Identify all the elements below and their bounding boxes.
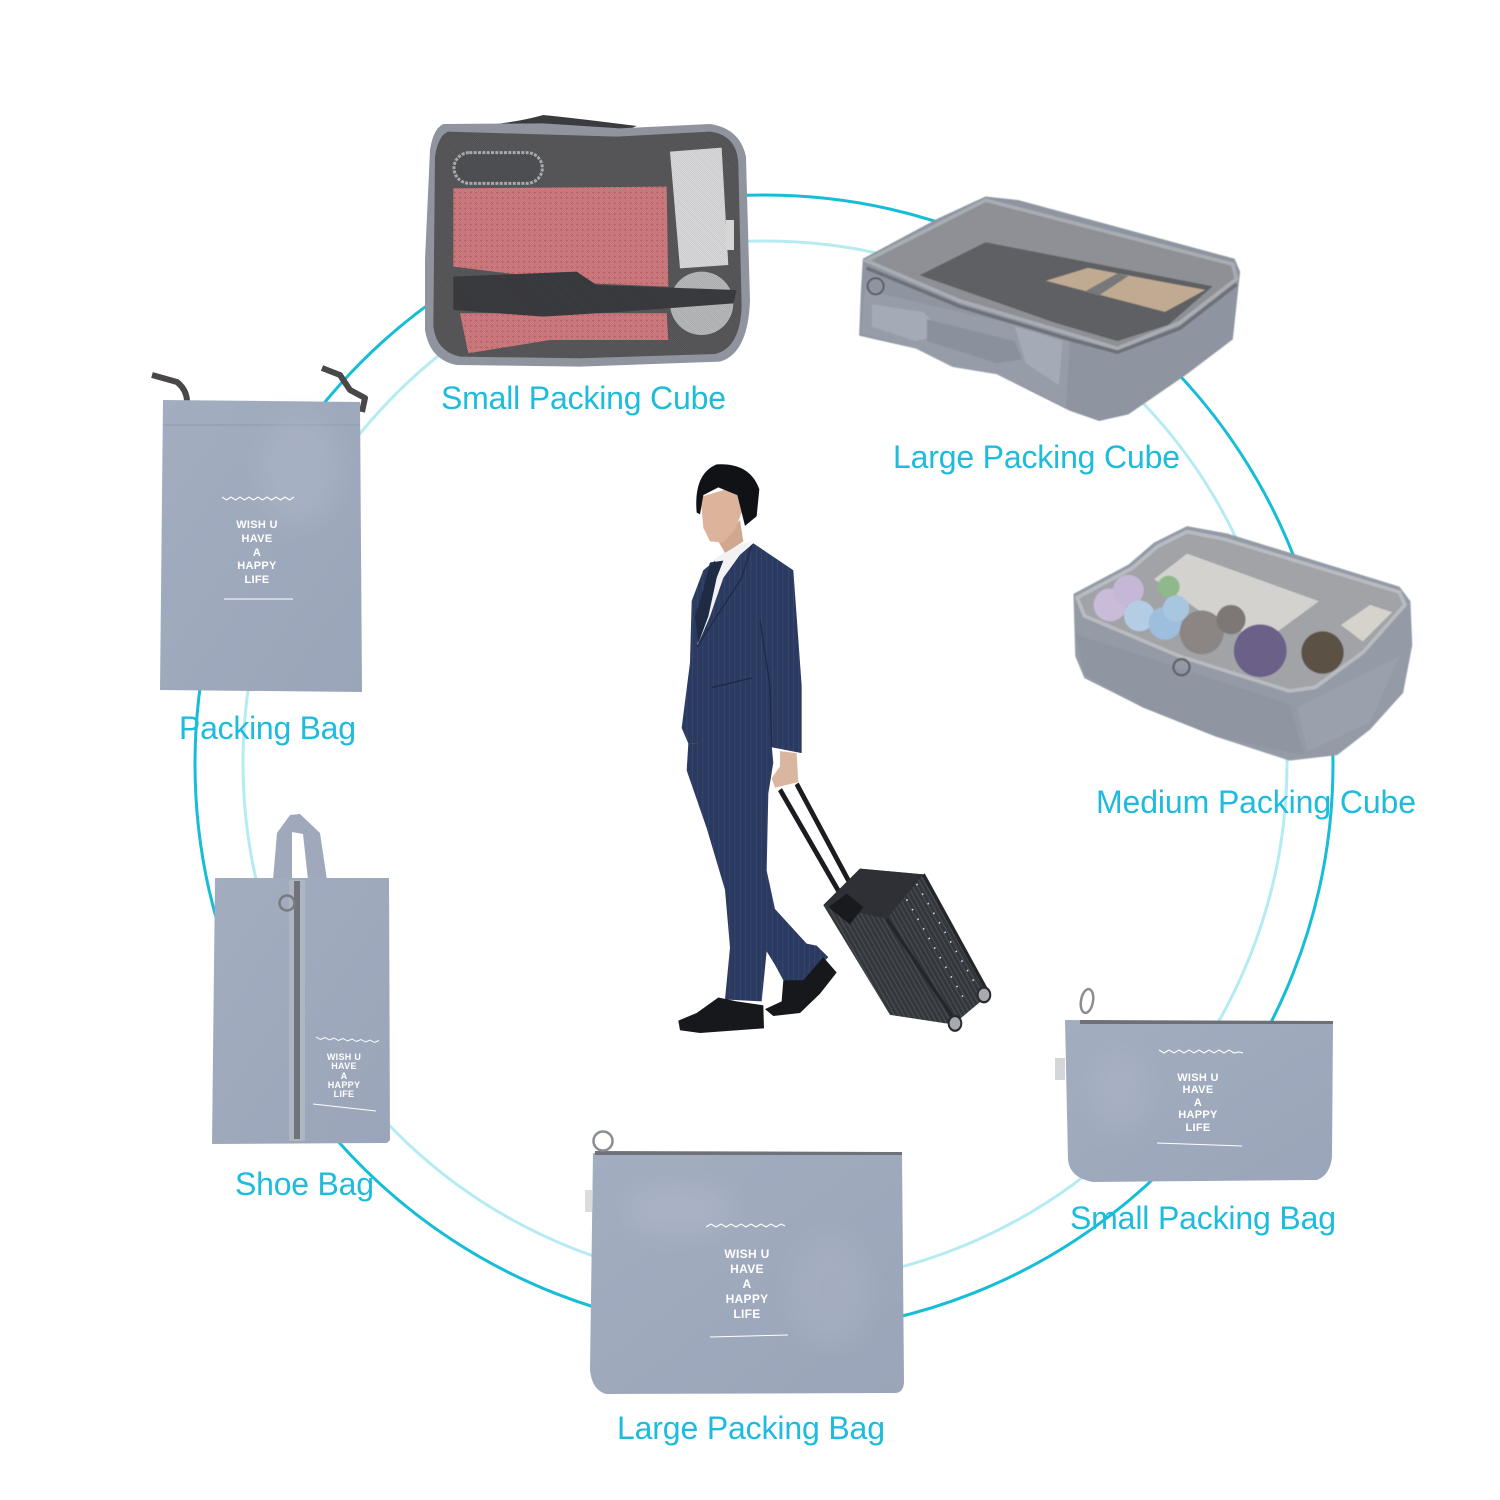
large packing cube (859, 196, 1240, 421)
zipper strip (1080, 1020, 1333, 1024)
trousers (687, 743, 828, 1001)
shirt (695, 541, 752, 632)
shoes (678, 998, 764, 1033)
suitcase (823, 869, 990, 1031)
label: large packing bag: Large Packing Bag (617, 1410, 885, 1446)
jacket (682, 543, 802, 753)
round tin (670, 272, 733, 335)
towel (453, 187, 668, 353)
bag slogan: HAPPY (237, 560, 277, 572)
bag slogan: LIFE (1185, 1122, 1211, 1134)
small packing bag (1055, 988, 1333, 1182)
white box (670, 148, 728, 268)
inner pale ring (243, 241, 1287, 1285)
bag slogan: WISH U (724, 1247, 770, 1261)
medium packing cube (1073, 526, 1412, 761)
side shading (861, 290, 1070, 407)
small packing cube (425, 115, 750, 367)
bag slogan: LIFE (244, 574, 270, 586)
neck (718, 520, 743, 553)
bag slogan: HAPPY (726, 1292, 768, 1306)
zipper (289, 880, 305, 1141)
bag slogan: HAVE (331, 1061, 357, 1071)
bag slogan: A (1194, 1097, 1202, 1109)
mesh lid (866, 200, 1236, 348)
tie (695, 561, 723, 643)
label: small packing bag: Small Packing Bag (1070, 1200, 1336, 1236)
bag slogan: LIFE (733, 1307, 761, 1321)
shoe bag (212, 814, 390, 1144)
face (701, 486, 742, 542)
hair (696, 464, 759, 526)
label: small packing cube: Small Packing Cube (441, 380, 726, 416)
paper contents (1154, 554, 1319, 642)
label: medium packing cube: Medium Packing Cube (1096, 784, 1416, 820)
outer cyan ring (195, 195, 1333, 1333)
large packing bag (585, 1132, 904, 1394)
zipper rings (868, 278, 884, 294)
bag slogan: HAPPY (1178, 1109, 1218, 1121)
bag slogan: HAVE (242, 533, 272, 545)
bag slogan: WISH U (236, 519, 278, 531)
zipper strip (595, 1151, 902, 1155)
traveller with suitcase (678, 464, 990, 1033)
scrunchies (1094, 588, 1127, 621)
tag (726, 220, 734, 250)
bag slogan: WISH U (327, 1052, 361, 1062)
bag slogan: LIFE (334, 1089, 354, 1099)
bag slogan: HAVE (1183, 1084, 1213, 1096)
zipper rings (1173, 659, 1190, 675)
mesh lid (1077, 532, 1405, 691)
drawstrings (152, 368, 365, 412)
bag slogan: HAPPY (328, 1080, 360, 1090)
label: shoe bag: Shoe Bag (235, 1166, 374, 1202)
photo card (1046, 268, 1205, 312)
bag slogan: A (341, 1071, 348, 1081)
hair brush (453, 272, 737, 317)
hair tie loop (454, 153, 542, 183)
handle (273, 814, 327, 880)
bag slogan: A (253, 547, 261, 559)
bag slogan: WISH U (1177, 1072, 1219, 1084)
suitcase handle (780, 784, 862, 905)
hand (772, 751, 798, 788)
bag slogan: A (743, 1277, 752, 1291)
label: packing bag: Packing Bag (179, 710, 356, 746)
dark contents (920, 242, 1213, 341)
packing bag (152, 368, 365, 692)
label: large packing cube: Large Packing Cube (893, 439, 1180, 475)
mesh overlay (433, 132, 742, 358)
bag slogan: HAVE (730, 1262, 764, 1276)
zipper edge (866, 268, 1236, 352)
